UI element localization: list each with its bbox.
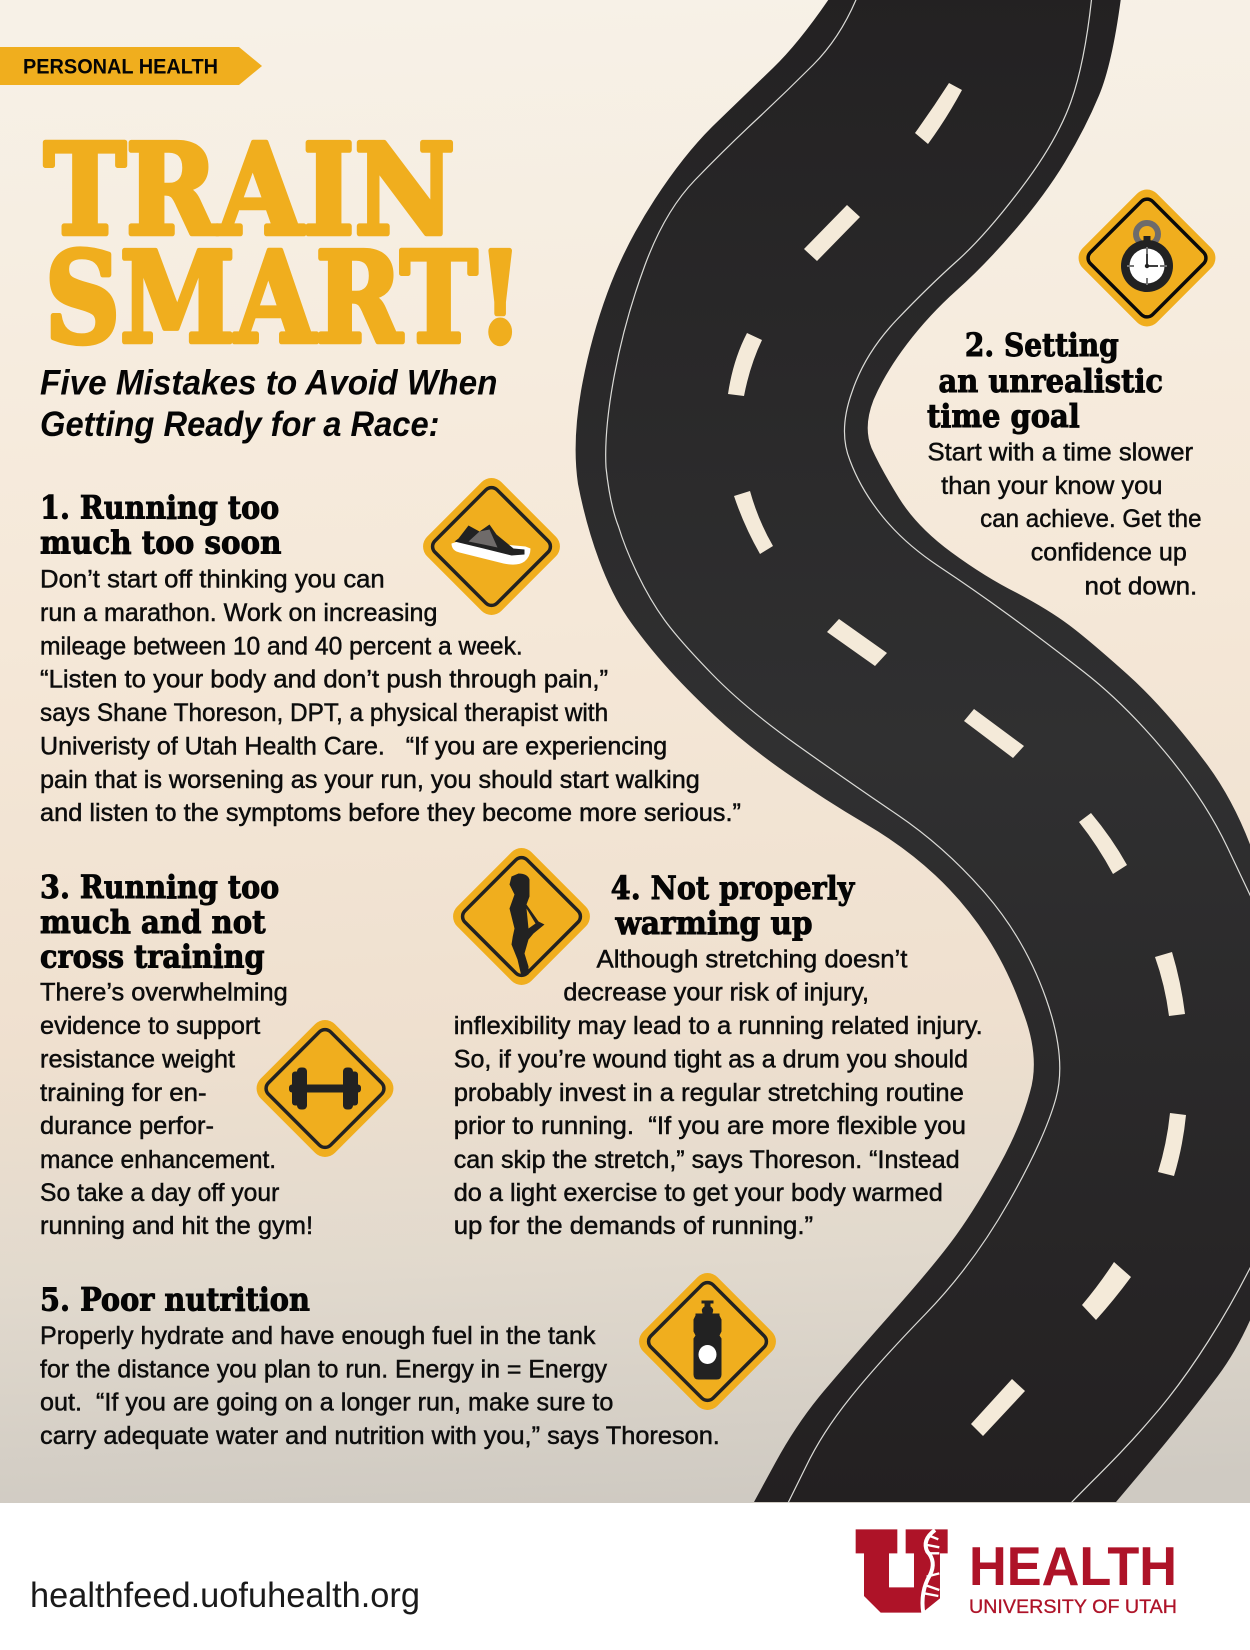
body 3: evidence to support <box>40 1013 260 1040</box>
section 2 <box>927 327 1202 600</box>
heading 4: 4. Not properly <box>611 870 856 907</box>
body 1: pain that is worsening as your run, you should start walking <box>40 767 700 794</box>
heading 2 <box>927 327 1163 435</box>
body 2 <box>927 440 1202 600</box>
body 1: run a marathon. Work on increasing <box>40 600 437 627</box>
icon: water bottle sign <box>633 1267 782 1416</box>
heading 3: much and not <box>40 904 266 941</box>
body 1: mileage between 10 and 40 percent a week. <box>40 634 523 661</box>
body 4 <box>454 947 983 1240</box>
logo: university of utah health: HEALTH <box>969 1535 1177 1597</box>
body 4: up for the demands of running.” <box>454 1213 813 1240</box>
section 5 <box>40 1282 720 1450</box>
body 4: probably invest in a regular stretching routine <box>454 1080 964 1107</box>
logo: university of utah health <box>856 1529 1177 1618</box>
body 3: mance enhancement. <box>40 1147 276 1174</box>
road <box>576 0 1250 1503</box>
body 1: Univeristy of Utah Health Care. “If you are experiencing <box>40 734 667 761</box>
heading 3: cross training <box>40 939 265 976</box>
body 1: “Listen to your body and don’t push through pain,” <box>40 667 608 694</box>
icon: shoe sign <box>417 472 566 621</box>
heading 5: 5. Poor nutrition <box>40 1282 310 1319</box>
body 5: Properly hydrate and have enough fuel in the tank <box>40 1323 596 1350</box>
icon: stopwatch sign <box>1073 184 1221 332</box>
subtitle <box>40 365 497 444</box>
heading 2: 2. Setting <box>965 327 1119 364</box>
icon: dumbbell sign <box>251 1014 399 1163</box>
category banner: PERSONAL HEALTH <box>23 56 218 78</box>
body 4: Although stretching doesn’t <box>597 947 908 974</box>
heading 3 <box>40 869 279 976</box>
icon: stretching runner sign <box>447 842 596 991</box>
body 5: out. “If you are going on a longer run, make sure to <box>40 1390 613 1417</box>
section 3 <box>40 869 313 1240</box>
website address: healthfeed.uofuhealth.org <box>30 1576 420 1615</box>
section 4 <box>454 870 983 1240</box>
footer panel <box>30 1529 1177 1618</box>
body 3: running and hit the gym! <box>40 1213 313 1240</box>
body 1: says Shane Thoreson, DPT, a physical therapist with <box>40 700 608 727</box>
body 4: So, if you’re wound tight as a drum you should <box>454 1047 968 1074</box>
body 2: confidence up <box>1031 540 1187 567</box>
subtitle: Getting Ready for a Race: <box>40 406 440 444</box>
body 1 <box>40 567 741 827</box>
body 2: Start with a time slower <box>927 440 1193 467</box>
title: TRAIN <box>44 118 455 264</box>
body 4: do a light exercise to get your body warmed <box>454 1180 943 1207</box>
body 4: prior to running. “If you are more flexible you <box>454 1113 966 1140</box>
body 3: There’s overwhelming <box>40 980 288 1007</box>
body 3: durance perfor- <box>40 1113 214 1140</box>
body 4: decrease your risk of injury, <box>563 980 869 1007</box>
body 4: inflexibility may lead to a running related injury. <box>454 1013 983 1040</box>
logo: university of utah health: UNIVERSITY OF UTAH <box>969 1596 1177 1618</box>
heading 2: time goal <box>927 398 1080 435</box>
body 3: training for en- <box>40 1080 207 1107</box>
body 5: carry adequate water and nutrition with you,” says Thoreson. <box>40 1423 720 1450</box>
heading 1: 1. Running too <box>40 490 279 527</box>
category banner <box>0 47 262 85</box>
body 3: So take a day off your <box>40 1180 279 1207</box>
body 5 <box>40 1323 720 1450</box>
body 2: than your know you <box>941 473 1163 500</box>
heading 1 <box>40 490 281 561</box>
body 4: can skip the stretch,” says Thoreson. “Instead <box>454 1147 960 1174</box>
title: SMART! <box>45 226 523 372</box>
heading 3: 3. Running too <box>40 869 279 906</box>
subtitle: Five Mistakes to Avoid When <box>40 365 497 403</box>
all text placed in scaled coordinates <box>40 327 1202 1450</box>
section 1 <box>40 490 741 827</box>
body 2: not down. <box>1085 573 1197 600</box>
body 1: Don’t start off thinking you can <box>40 567 385 594</box>
heading 4: warming up <box>615 905 813 942</box>
body 3 <box>40 980 313 1240</box>
body 2: can achieve. Get the <box>980 506 1202 533</box>
heading 2: an unrealistic <box>939 363 1163 400</box>
body 3: resistance weight <box>40 1047 235 1074</box>
heading 4 <box>611 870 856 942</box>
title <box>44 118 523 372</box>
heading 1: much too soon <box>40 524 281 561</box>
body 1: and listen to the symptoms before they become more serious.” <box>40 800 741 827</box>
body 5: for the distance you plan to run. Energy in = Energy <box>40 1357 608 1384</box>
